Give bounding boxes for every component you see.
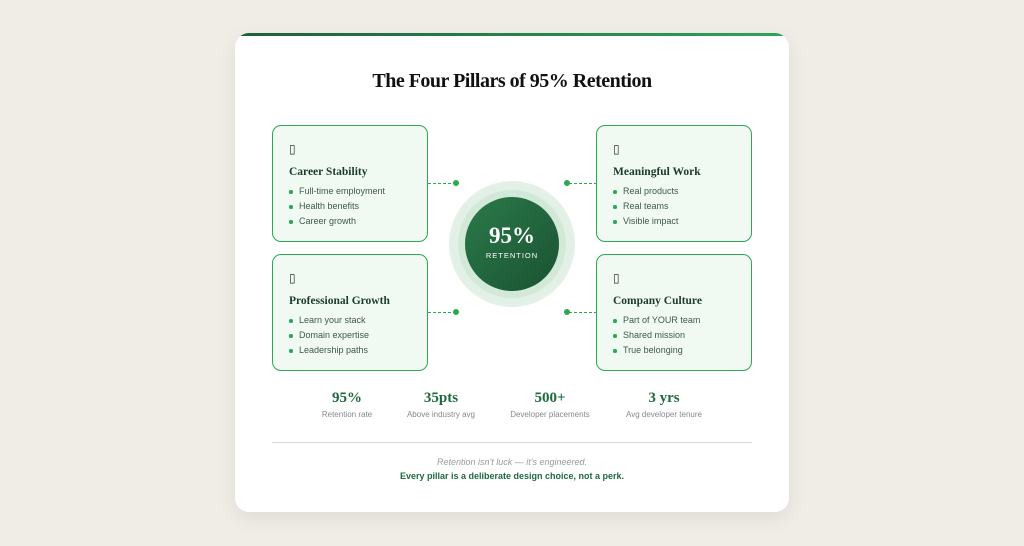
card: 95%: [332, 390, 362, 406]
center circle: 95%: [489, 223, 535, 248]
panel: company culture: True belonging: [623, 345, 683, 355]
panel: career stability: Career growth: [299, 216, 356, 226]
panel: career stability: Full-time employment: [299, 186, 385, 196]
panel: company culture: Company Culture: [613, 295, 702, 307]
panel: company culture: [596, 254, 752, 371]
stats: [322, 390, 702, 419]
panel: meaningful work: Meaningful Work: [613, 166, 701, 178]
panel: professional growth: Leadership paths: [299, 345, 368, 355]
panel: career stability: [272, 125, 428, 242]
panel: professional growth: Professional Growth: [289, 295, 390, 307]
panel: professional growth: ▯: [289, 271, 296, 285]
card: 500+: [534, 390, 566, 406]
panel: professional growth: Domain expertise: [299, 330, 369, 340]
card: [235, 33, 789, 512]
card: Developer placements: [510, 410, 590, 419]
title: The Four Pillars of 95% Retention: [372, 70, 652, 92]
panel: meaningful work: [596, 125, 752, 242]
panel: meaningful work: Real products: [623, 186, 679, 196]
panel: professional growth: [272, 254, 428, 371]
footer text: Retention isn't luck — it's engineered.: [437, 457, 587, 467]
footer text: Every pillar is a deliberate design choice, not a perk.: [400, 471, 624, 481]
panel: meaningful work: Real teams: [623, 201, 669, 211]
panel: career stability: ▯: [289, 142, 296, 156]
connectors: [428, 180, 596, 315]
panel: meaningful work: Visible impact: [623, 216, 678, 226]
center circle: RETENTION: [486, 251, 538, 260]
panel: company culture: Part of YOUR team: [623, 315, 700, 325]
card: 35pts: [424, 390, 458, 406]
panel: career stability: Career Stability: [289, 166, 367, 178]
card: Above industry avg: [407, 410, 475, 419]
panel: company culture: Shared mission: [623, 330, 685, 340]
card: Retention rate: [322, 410, 372, 419]
card: 3 yrs: [648, 390, 680, 406]
panel: company culture: ▯: [613, 271, 620, 285]
panel: meaningful work: ▯: [613, 142, 620, 156]
panel: career stability: Health benefits: [299, 201, 359, 211]
card: Avg developer tenure: [626, 410, 702, 419]
panel: professional growth: Learn your stack: [299, 315, 366, 325]
footer text: [400, 457, 624, 481]
center circle: [449, 181, 575, 307]
